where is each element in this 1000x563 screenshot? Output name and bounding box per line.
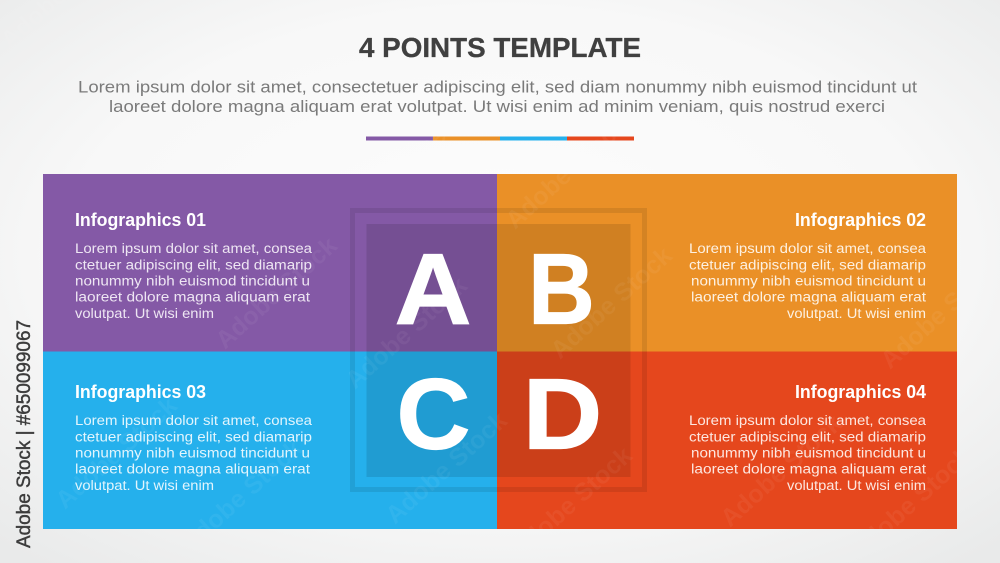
panel text: infographics 01 (75, 210, 313, 321)
panel watermarks: Adobe Stock (500, 111, 633, 234)
panel: infographics 04 background (497, 352, 957, 529)
panel watermarks: Adobe Stock (545, 241, 678, 364)
heading 02: Infographics 02 (795, 210, 926, 230)
panel text: infographics 02 (689, 210, 927, 321)
subtitle text (78, 78, 917, 116)
subtitle text: laoreet dolore magna aliquam erat volutpat. Ut wisi enim ad minim veniam, quis nostrud exerci (109, 97, 885, 116)
panel watermarks: Adobe Stock (380, 406, 513, 529)
body 01: ctetuer adipiscing elit, sed diamarip (75, 258, 312, 272)
heading 03: Infographics 03 (75, 382, 206, 402)
panel watermarks: Adobe Stock (505, 441, 638, 563)
body 02: volutpat. Ut wisi enim (787, 306, 926, 321)
panel: infographics 02 background (497, 174, 957, 352)
stock watermarks (0, 0, 937, 204)
stock watermarks: Adobe Stock (705, 81, 838, 204)
panel watermarks: Adobe Stock (715, 409, 848, 532)
panel watermarks: Adobe Stock (340, 271, 473, 394)
central frame overlay (352, 210, 644, 490)
heading 01: Infographics 01 (75, 210, 206, 230)
panel watermarks: Adobe Stock (175, 434, 308, 557)
body 04: Lorem ipsum dolor sit amet, consea (689, 413, 927, 428)
letter C: C (397, 359, 470, 470)
panel watermarks (50, 111, 1000, 563)
stock watermarks: Adobe Stock (40, 36, 173, 159)
body 03: volutpat. Ut wisi enim (75, 478, 214, 493)
panel text: infographics 04 (689, 382, 927, 493)
body 02: laoreet dolore magna aliquam erat (691, 290, 926, 304)
body 02: nonummy nibh euismod tincidunt u (691, 274, 926, 288)
panel watermarks: Adobe Stock (845, 441, 978, 563)
heading 04: Infographics 04 (795, 382, 926, 402)
body 03: ctetuer adipiscing elit, sed diamarip (75, 430, 312, 444)
letter B: B (528, 234, 595, 345)
vertical stock id label: Adobe Stock | #650099067 (14, 320, 35, 548)
panel watermarks: Adobe Stock (50, 391, 183, 514)
body 04: volutpat. Ut wisi enim (787, 478, 926, 493)
title: 4 POINTS TEMPLATE (359, 32, 641, 63)
subtitle text: Lorem ipsum dolor sit amet, consectetuer adipiscing elit, sed diam nonummy nibh euismod tincidunt ut (78, 78, 917, 96)
body 02: ctetuer adipiscing elit, sed diamarip (689, 258, 926, 272)
panel: infographics 03 background (43, 352, 497, 529)
body 04 (689, 413, 927, 493)
panel: infographics 01 background (43, 174, 497, 352)
body 03: laoreet dolore magna aliquam erat (75, 462, 310, 476)
body 04: ctetuer adipiscing elit, sed diamarip (689, 430, 926, 444)
letter A: A (395, 233, 471, 345)
body 01: Lorem ipsum dolor sit amet, consea (75, 241, 313, 256)
body 04: nonummy nibh euismod tincidunt u (691, 446, 926, 460)
panel watermarks: Adobe Stock (210, 231, 343, 354)
panel text: infographics 03 (75, 382, 313, 493)
body 03 (75, 413, 313, 493)
body 01 (75, 241, 313, 321)
body 03: Lorem ipsum dolor sit amet, consea (75, 413, 313, 428)
body 01: volutpat. Ut wisi enim (75, 306, 214, 321)
body 01: laoreet dolore magna aliquam erat (75, 290, 310, 304)
body 03: nonummy nibh euismod tincidunt u (75, 446, 310, 460)
body 04: laoreet dolore magna aliquam erat (691, 462, 926, 476)
stock watermarks: Adobe Stock (375, 71, 508, 194)
letter D: D (523, 359, 602, 470)
body 02: Lorem ipsum dolor sit amet, consea (689, 241, 927, 256)
body 01: nonummy nibh euismod tincidunt u (75, 274, 310, 288)
body 02 (689, 241, 927, 321)
four colour title rule (366, 136, 634, 140)
